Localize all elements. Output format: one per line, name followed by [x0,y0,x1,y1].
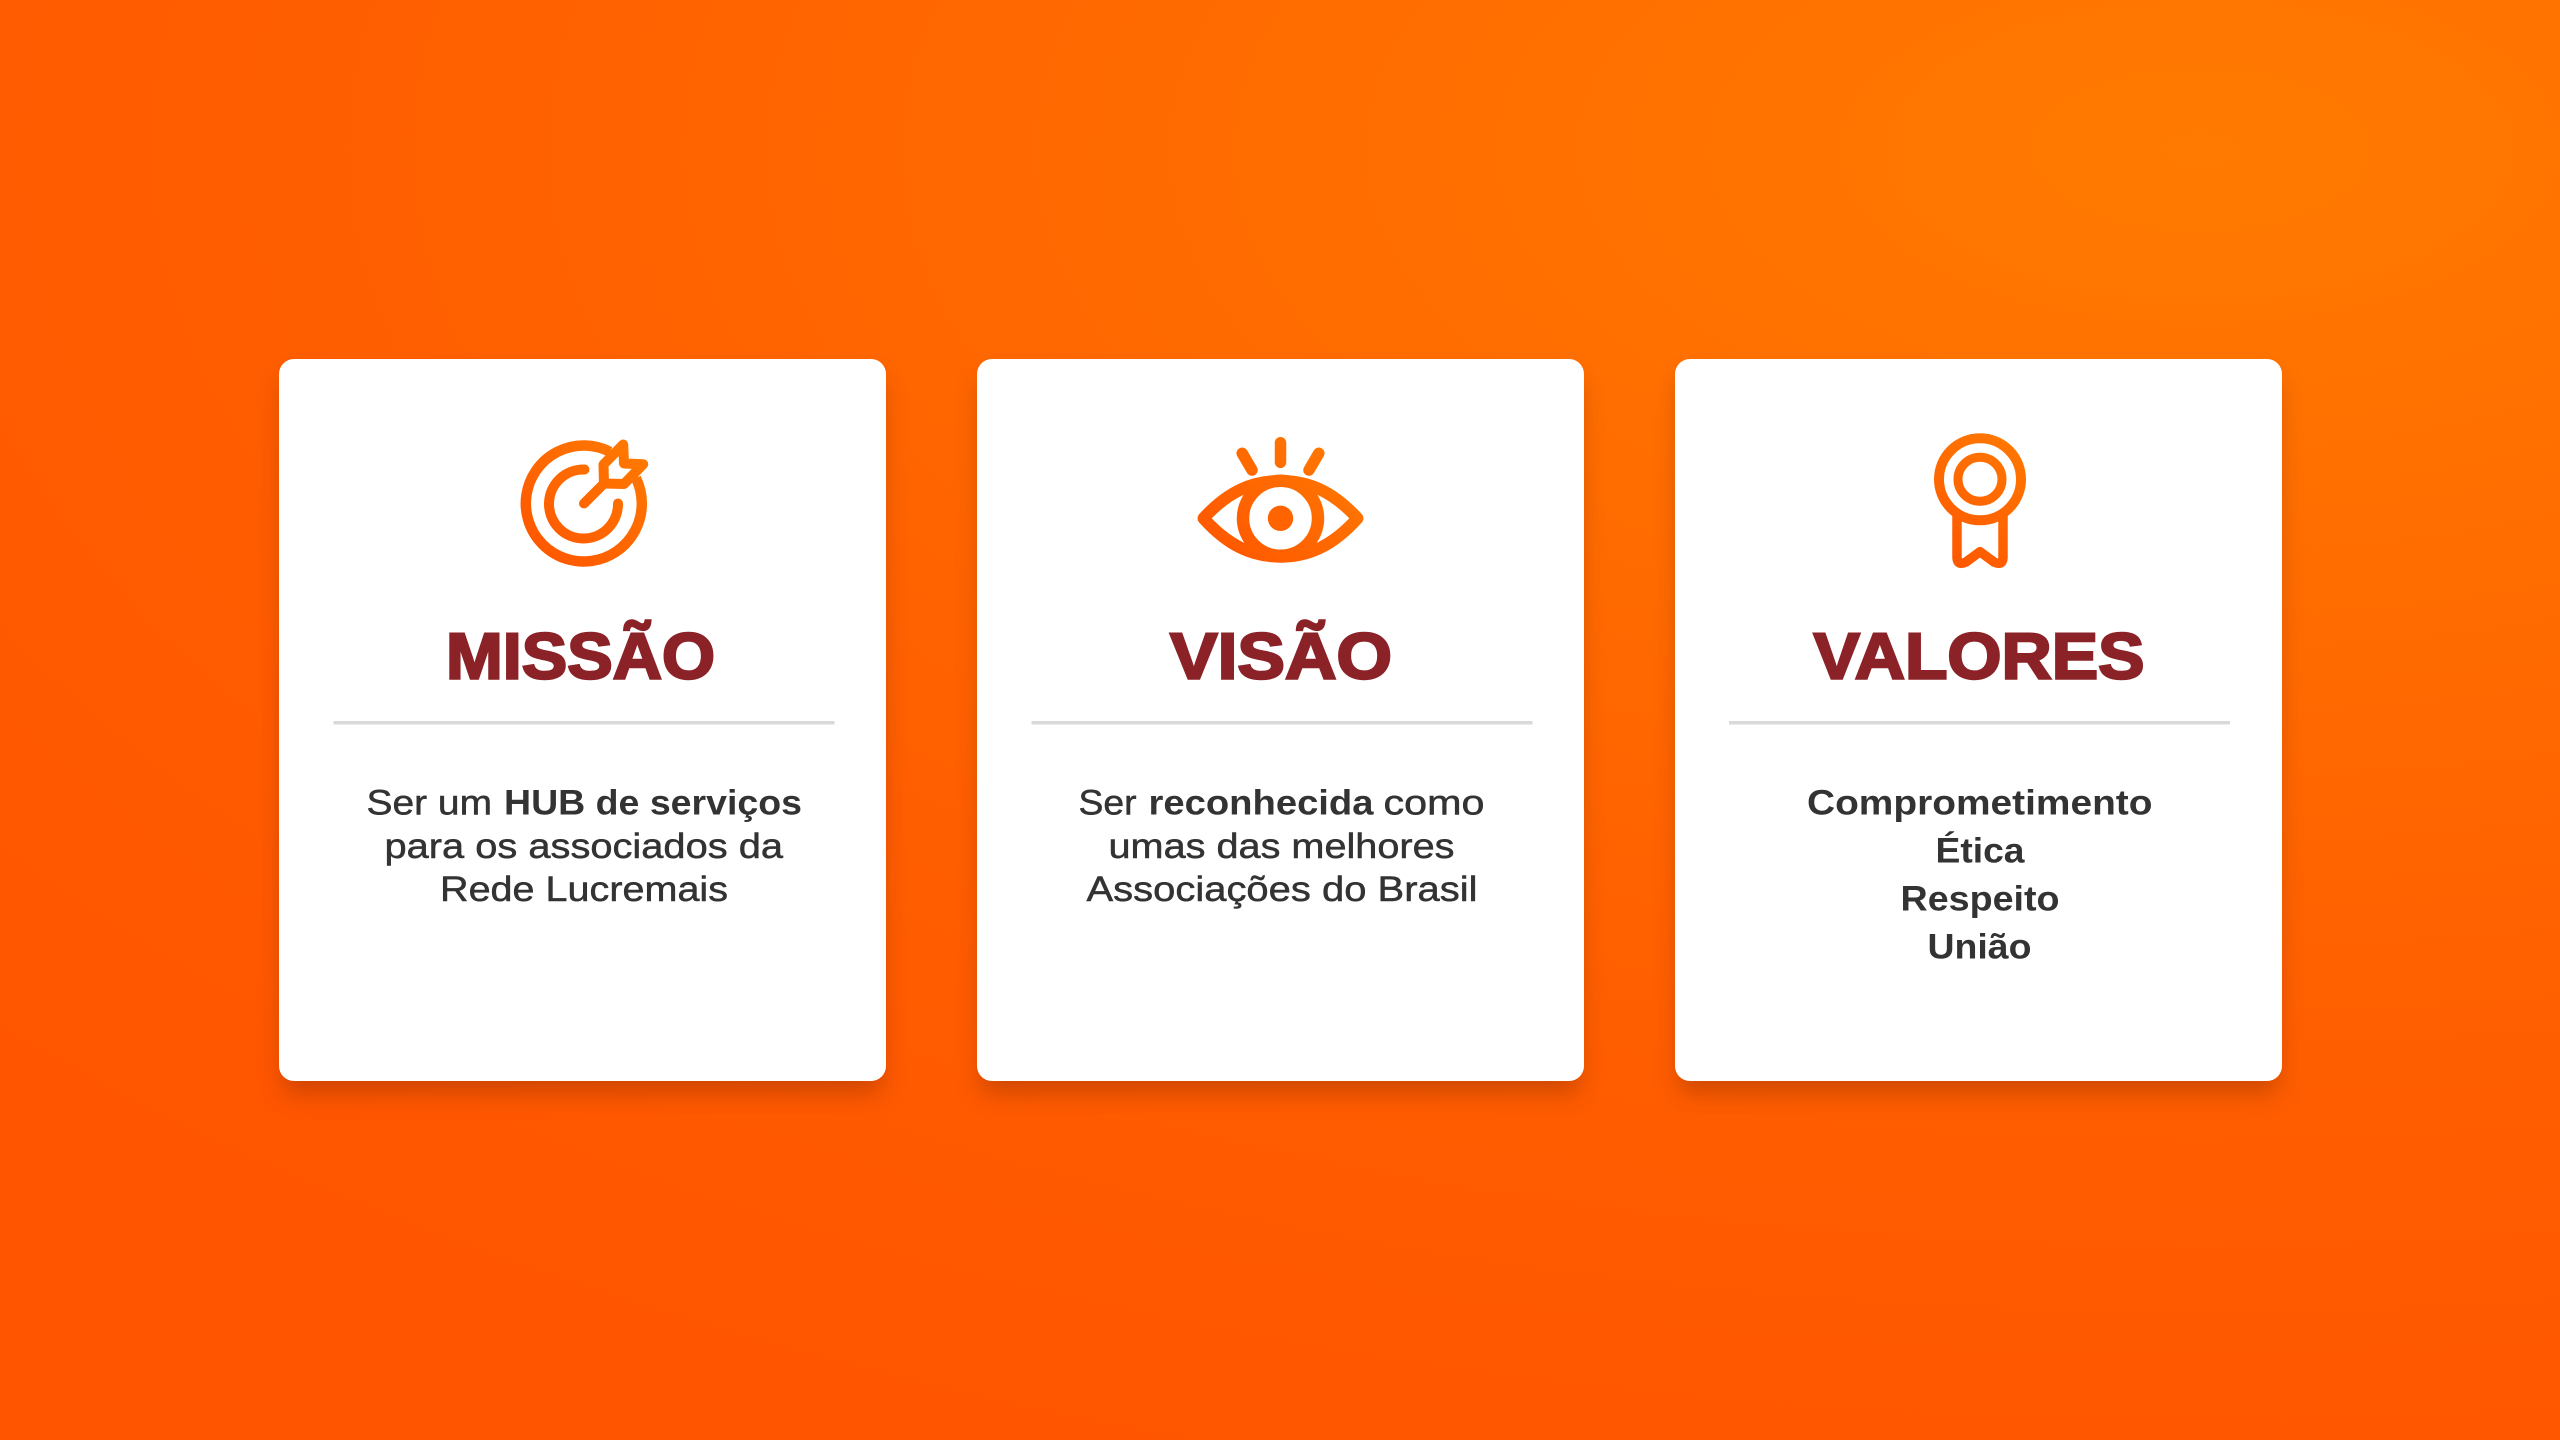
heading: VISÃO: VISÃO [1170,620,1392,692]
text block: missão [366,784,802,909]
heading: VALORES: VALORES [1814,620,2144,692]
text block: valores list: União [1928,928,2032,966]
icon: medal with ribbon [1939,438,2021,563]
panel: visão [976,359,1584,1081]
text block: visão: como [1383,784,1484,822]
panel: valores [1675,359,2282,1081]
text block: missão: Ser um [366,784,492,822]
text block: missão: Rede Lucremais [440,870,728,909]
text block: missão: HUB de serviços [504,784,802,822]
text block: visão [1078,784,1484,909]
text block: visão: Ser [1078,784,1136,822]
heading: MISSÃO: MISSÃO [446,620,714,692]
text block: missão: para os associados da [384,827,783,866]
text block: valores list: Ética [1936,830,2025,870]
icon: eye [1203,443,1357,557]
icon: target with arrow [525,444,643,561]
text block: valores list: Respeito [1900,880,2060,918]
text block: valores list [1807,784,2152,966]
panel: missão [278,359,886,1081]
text block: visão: reconhecida [1148,784,1374,822]
text block: visão: umas das melhores [1108,827,1454,866]
text block: valores list: Comprometimento [1807,784,2152,822]
text block: visão: Associações do Brasil [1086,870,1477,909]
